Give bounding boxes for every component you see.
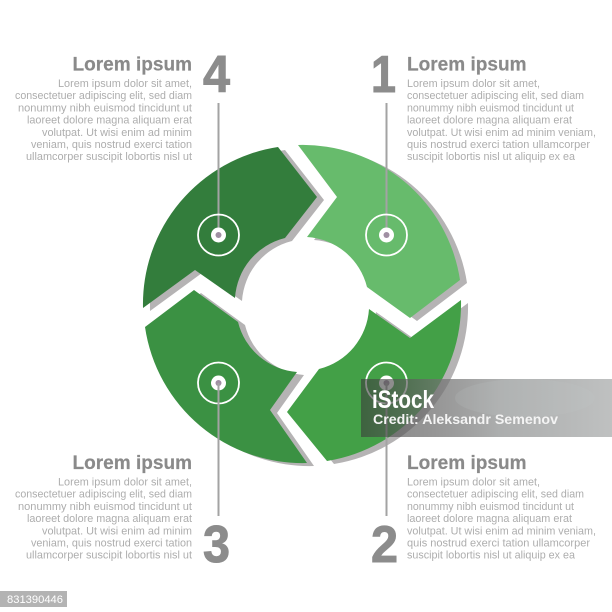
text block 1: Lorem ipsum (407, 54, 526, 76)
connector line 4 (218, 103, 220, 235)
text block 2: consectetuer adipiscing elit, sed diam (407, 489, 584, 501)
text block 4: volutpat. Ut wisi enim ad minim (42, 127, 192, 139)
text block 3: ullamcorper suscipit lobortis nisl ut (26, 550, 192, 562)
text block 1: nonummy nibh euismod tincidunt ut (407, 102, 574, 114)
watermark banner: Credit: Aleksandr Semenov (373, 411, 558, 427)
text block 1: Lorem ipsum dolor sit amet, (407, 78, 540, 90)
text block 2: suscipit lobortis nisl ut aliquip ex ea (407, 550, 576, 562)
text block 3: nonummy nibh euismod tincidunt ut (18, 501, 192, 513)
segment 3: green arrow (145, 290, 307, 463)
text block 4: consectetuer adipiscing elit, sed diam (15, 90, 192, 102)
text block 1: laoreet dolore magna aliquam erat (407, 115, 572, 127)
segment 4: dark green arrow (143, 147, 317, 308)
text block 4 (15, 54, 192, 163)
connector line 2 (386, 383, 388, 516)
marker 4 (198, 214, 239, 256)
segment 2: mid green arrow (287, 300, 461, 461)
number 2: 2 (371, 516, 398, 574)
text block 1: consectetuer adipiscing elit, sed diam (407, 90, 584, 102)
text block 3: Lorem ipsum dolor sit amet, (58, 476, 192, 488)
image id tag: 831390446 (7, 594, 63, 606)
text block 1: quis nostrud exerci tation ullamcorper (407, 139, 590, 151)
segment 1: light green arrow (298, 145, 460, 318)
text block 2: quis nostrud exerci tation ullamcorper (407, 538, 590, 550)
text block 4: veniam, quis nostrud exerci tation (31, 139, 192, 151)
text block 1: suscipit lobortis nisl ut aliquip ex ea (407, 151, 576, 163)
text block 2 (407, 453, 596, 562)
marker 1 (366, 214, 407, 256)
marker 2 (366, 362, 407, 404)
text block 4: laoreet dolore magna aliquam erat (27, 115, 192, 127)
text block 2: nonummy nibh euismod tincidunt ut (407, 501, 574, 513)
text block 2: volutpat. Ut wisi enim ad minim veniam, (407, 525, 596, 537)
text block 3: Lorem ipsum (72, 453, 192, 474)
text block 2: laoreet dolore magna aliquam erat (407, 513, 572, 525)
text block 3: volutpat. Ut wisi enim ad minim (42, 525, 192, 537)
connector line 3 (218, 383, 220, 516)
number 3: 3 (203, 516, 230, 574)
text block 4: Lorem ipsum (72, 54, 192, 76)
text block 4: Lorem ipsum dolor sit amet, (58, 78, 192, 90)
text block 3 (15, 453, 192, 562)
number 1: 1 (371, 46, 396, 104)
ring shadows (150, 148, 468, 466)
connector line 1 (386, 103, 388, 235)
watermark banner (361, 379, 612, 437)
text block 2: Lorem ipsum (407, 453, 526, 474)
text block 3: veniam, quis nostrud exerci tation (31, 538, 192, 550)
text block 4: ullamcorper suscipit lobortis nisl ut (26, 151, 192, 163)
text block 3: laoreet dolore magna aliquam erat (27, 513, 192, 525)
number 4: 4 (203, 46, 230, 104)
text block 1: volutpat. Ut wisi enim ad minim veniam, (407, 127, 596, 139)
text block 4: nonummy nibh euismod tincidunt ut (18, 102, 192, 114)
text block 3: consectetuer adipiscing elit, sed diam (15, 489, 192, 501)
image id tag (0, 591, 67, 607)
text block 2: Lorem ipsum dolor sit amet, (407, 476, 540, 488)
text block 1 (407, 54, 596, 163)
marker 3 (198, 362, 239, 404)
watermark banner: iStock (372, 386, 434, 414)
